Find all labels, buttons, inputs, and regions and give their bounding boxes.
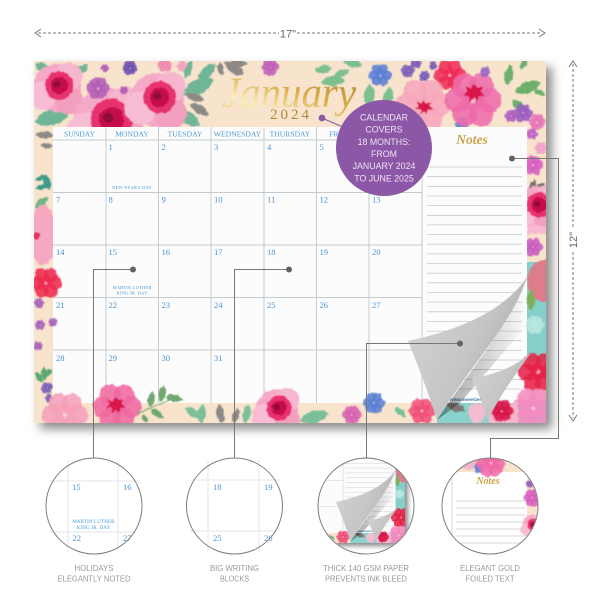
purple callout (319, 100, 432, 196)
detail circle: gold foil (442, 458, 538, 554)
date numbers: 16 (162, 247, 171, 257)
notes heading: Notes (455, 132, 488, 147)
caption: writing blocks: BIG WRITING (210, 563, 259, 573)
caption: holidays: ELEGANTLY NOTED (58, 574, 130, 584)
callout pointer (322, 118, 345, 128)
date numbers: 1 (108, 142, 113, 152)
detail circle: writing blocks: 26 (264, 533, 273, 543)
date numbers: 25 (267, 300, 276, 310)
floral details over the page (30, 268, 435, 437)
year 2024: 2024 (270, 107, 312, 123)
date numbers: 21 (56, 300, 65, 310)
date numbers: 23 (162, 300, 170, 310)
date numbers: 20 (372, 247, 381, 257)
date numbers: 11 (267, 194, 275, 204)
date numbers: 27 (372, 300, 381, 310)
date numbers: 26 (320, 300, 329, 310)
holiday labels: MARTIN LUTHER (112, 285, 152, 290)
detail circle: writing blocks (186, 458, 282, 554)
page curl shadow (437, 277, 527, 420)
height label: 12" (568, 232, 580, 248)
caption: gold foil: FOILED TEXT (466, 574, 515, 584)
date numbers: 31 (214, 353, 223, 363)
date numbers: 22 (108, 300, 117, 310)
date numbers: 17 (214, 247, 223, 257)
callout text: FROM (371, 149, 397, 159)
notes ruled lines (427, 167, 522, 389)
date numbers: 30 (162, 353, 170, 363)
detail circle: holidays: KING JR. DAY (77, 526, 111, 531)
callout text: JANUARY 2024 (353, 161, 415, 171)
caption: paper (323, 563, 409, 584)
width dimension arrow (35, 28, 545, 40)
date numbers: 29 (108, 353, 117, 363)
width label: 17" (280, 28, 296, 40)
detail circle: holidays (46, 458, 142, 554)
date numbers: 12 (320, 194, 328, 204)
date numbers: 2 (162, 142, 166, 152)
date numbers: 10 (214, 194, 223, 204)
callout text: COVERS (365, 124, 403, 134)
callout text: CALENDAR (360, 112, 408, 122)
big page curl (408, 277, 527, 420)
calendar sheet (28, 54, 563, 437)
next sheet revealed by curl (437, 260, 563, 428)
floral border under the page (28, 54, 560, 427)
weekday headers (64, 132, 339, 136)
notes panel (422, 127, 527, 403)
caption: holidays: HOLIDAYS (74, 563, 114, 573)
date numbers: 9 (162, 194, 166, 204)
date numbers: 5 (320, 142, 324, 152)
date numbers: 15 (108, 247, 117, 257)
date numbers: 14 (56, 247, 65, 257)
detail circle: writing blocks: 19 (264, 482, 273, 492)
title January: January (222, 70, 357, 117)
caption: paper: THICK 140 GSM PAPER (323, 563, 409, 573)
caption: writing blocks: BLOCKS (220, 574, 249, 584)
date numbers: 8 (108, 194, 113, 204)
weekday headers: THURSDAY (270, 130, 311, 139)
detail circle: holidays: 27 (123, 533, 132, 543)
caption: writing blocks (210, 563, 259, 584)
detail circle: holidays: 22 (72, 533, 81, 543)
caption: holidays (58, 563, 130, 584)
caption: gold foil (460, 563, 520, 584)
notes heading detail: Notes (475, 476, 500, 487)
leader lines (94, 158, 558, 458)
holiday labels: KING JR. DAY (116, 290, 148, 296)
weekday headers: FRIDAY (329, 130, 357, 139)
calendar page (53, 127, 422, 403)
date numbers: 24 (214, 300, 223, 310)
date numbers: 4 (267, 142, 272, 152)
grid lines (53, 140, 422, 350)
detail circle: writing blocks: 25 (213, 533, 222, 543)
detail circle: writing blocks: 18 (213, 482, 222, 492)
detail circle: holidays: MARTIN LUTHER (72, 520, 115, 525)
height dimension arrow (568, 61, 580, 421)
date numbers: 18 (267, 247, 276, 257)
sheet shadow (40, 67, 552, 429)
date numbers: 3 (214, 142, 218, 152)
detail circle: thick paper (318, 458, 414, 554)
caption: paper: PREVENTS INK BLEED (325, 574, 407, 584)
detail circle: holidays: 15 (72, 482, 81, 492)
date numbers: 28 (56, 353, 65, 363)
leader dots (130, 156, 515, 346)
detail circle: holidays: 16 (123, 482, 132, 492)
callout text: 18 MONTHS: (358, 137, 410, 147)
peach border background (34, 61, 546, 423)
date numbers: 7 (56, 194, 61, 204)
callout text (353, 112, 415, 184)
holiday labels (112, 185, 153, 296)
weekday headers: SUNDAY (64, 130, 95, 139)
holiday labels: NEW YEAR'S DAY (112, 185, 153, 190)
callout circle (336, 100, 432, 196)
caption: gold foil: ELEGANT GOLD (460, 563, 520, 573)
weekday headers: SATURDAY (376, 130, 416, 139)
weekday headers: WEDNESDAY (214, 130, 262, 139)
weekday headers: MONDAY (115, 130, 149, 139)
date numbers (56, 142, 381, 363)
weekday headers: TUESDAY (168, 130, 203, 139)
website line: www.sweetzero.com (449, 397, 495, 402)
date numbers: 19 (320, 247, 328, 257)
callout text: TO JUNE 2025 (354, 174, 414, 184)
small page curl (472, 350, 533, 420)
date numbers: 13 (372, 194, 381, 204)
